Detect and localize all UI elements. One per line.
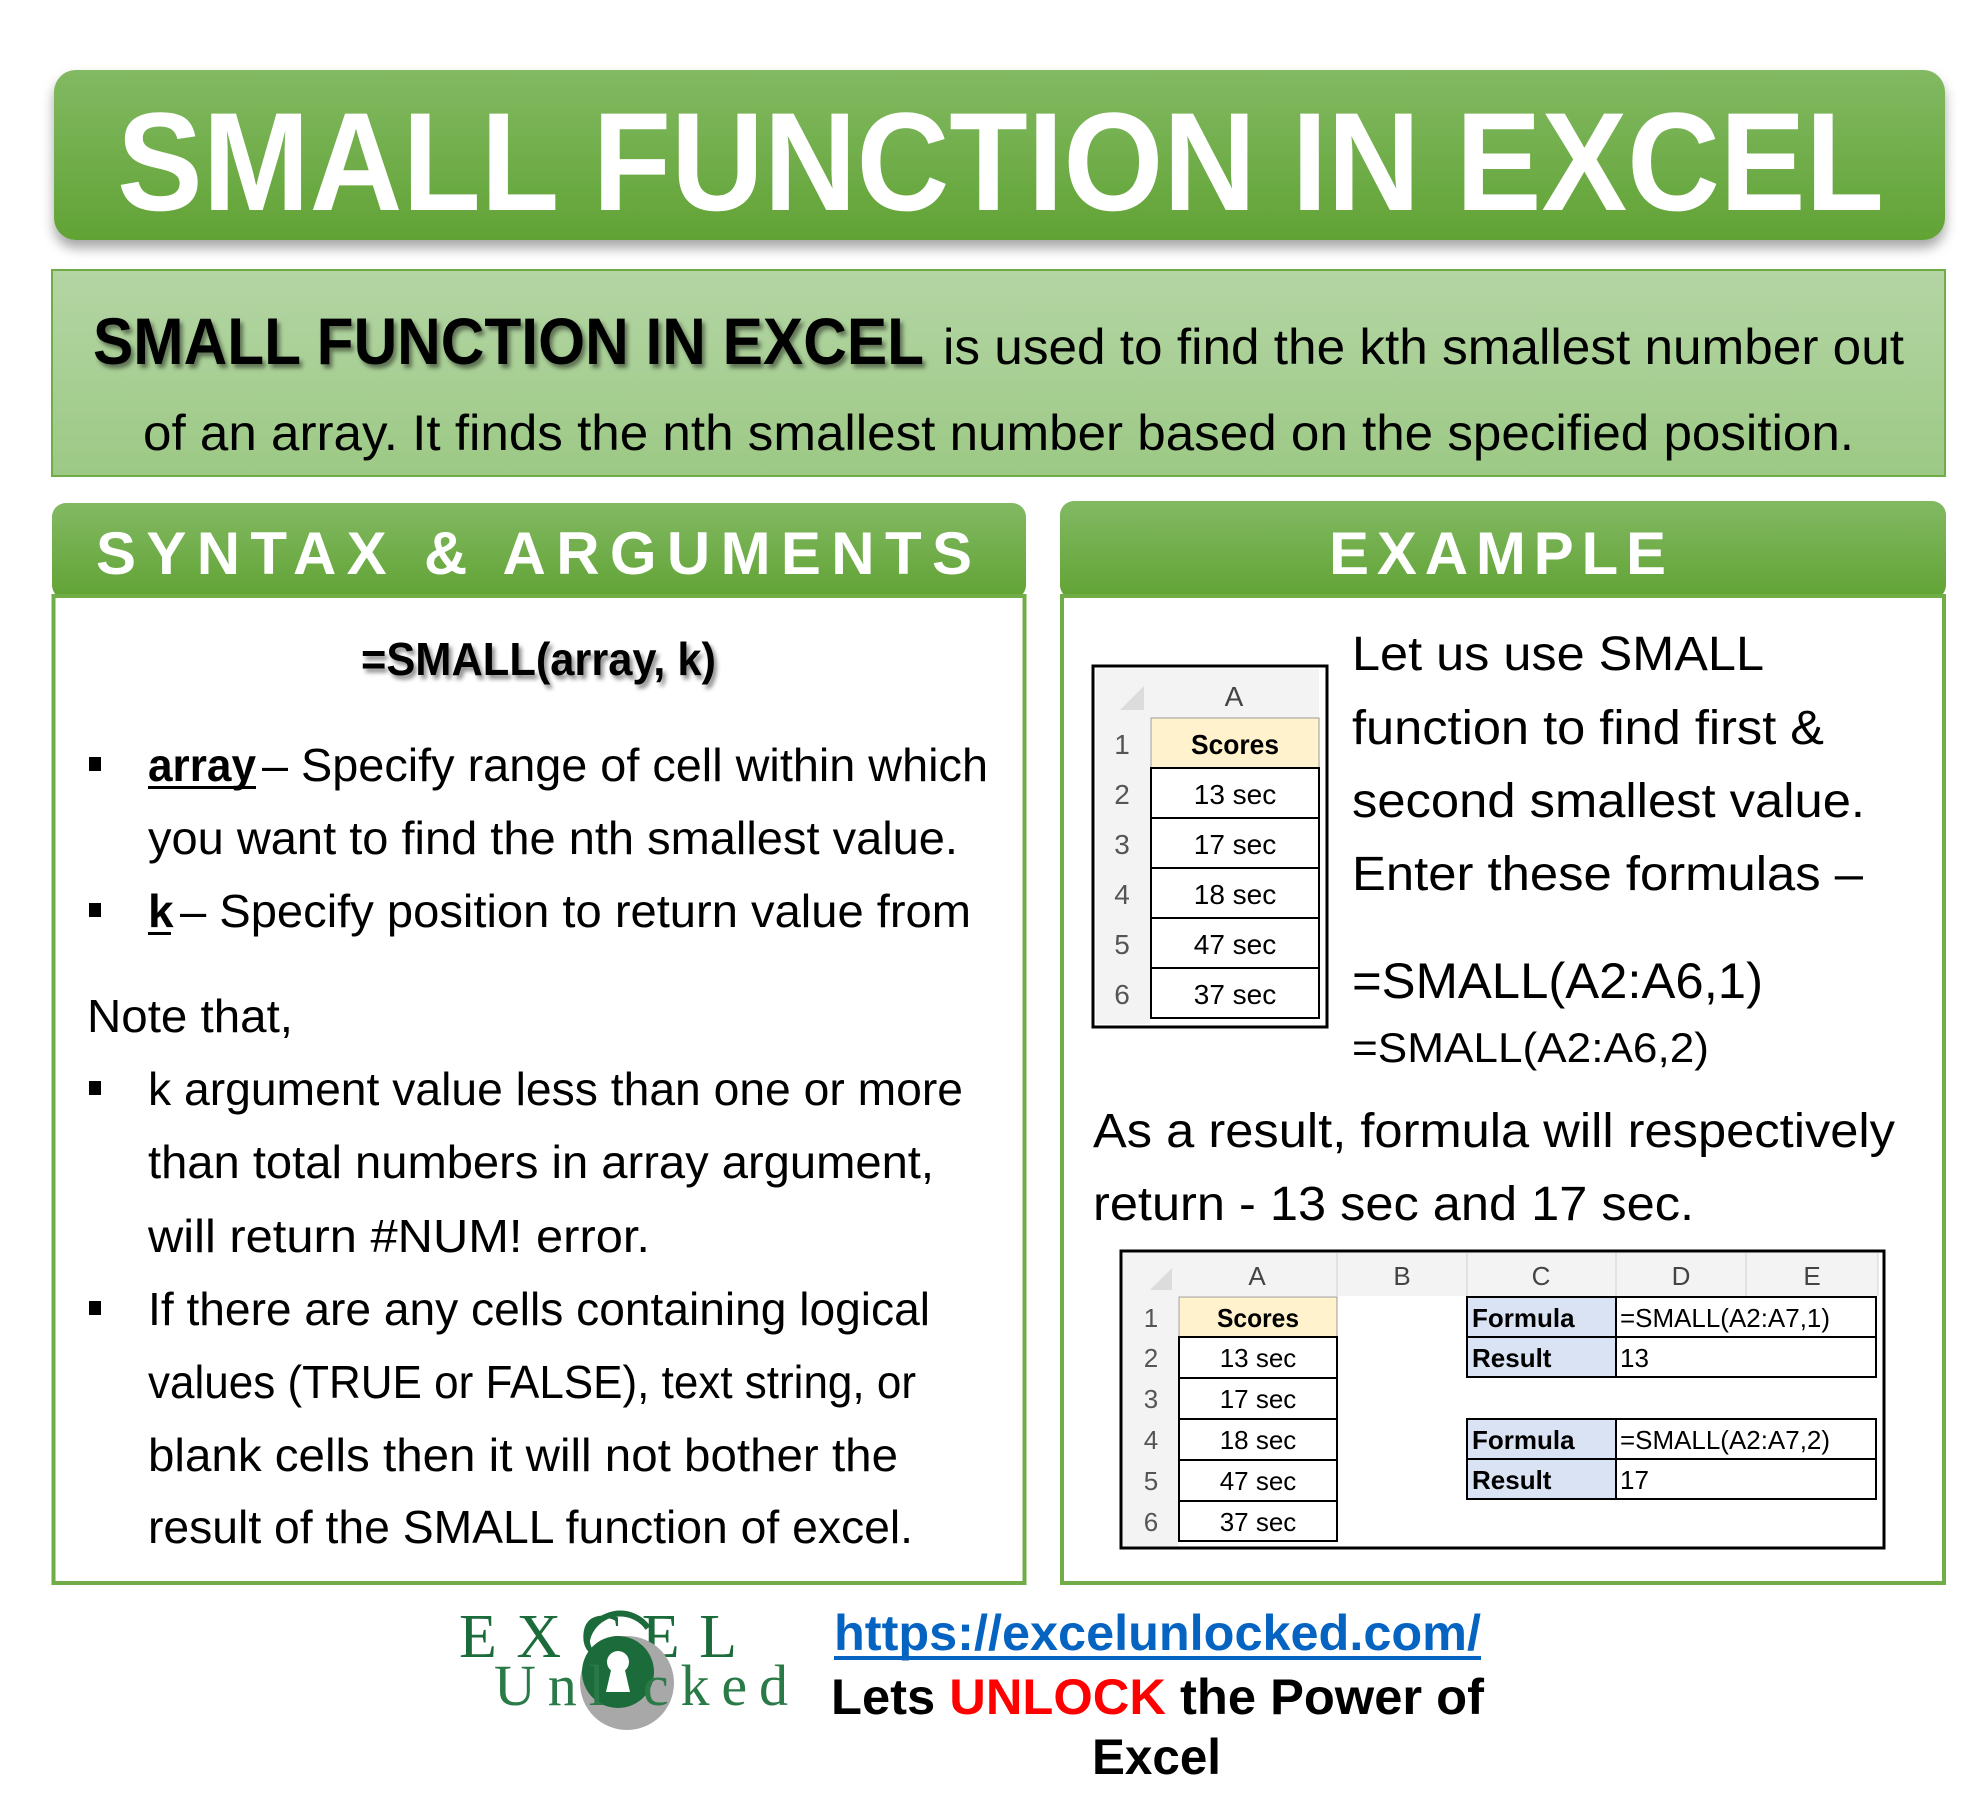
definition box: is used to find the kth smallest number out bbox=[943, 319, 1904, 375]
result table: Formula bbox=[1472, 1303, 1575, 1333]
result table: 4 bbox=[1144, 1425, 1158, 1455]
panel: example bbox=[1062, 596, 1944, 1583]
footer: url and tagline: https://excelunlocked.com/ bbox=[834, 1605, 1481, 1661]
header: example bbox=[1060, 501, 1946, 599]
small data table: 5 bbox=[1114, 929, 1130, 960]
result table: 5 bbox=[1144, 1466, 1158, 1496]
result table: Result bbox=[1472, 1465, 1552, 1495]
footer: url and tagline: Excel bbox=[1092, 1729, 1221, 1785]
result table: E bbox=[1803, 1261, 1821, 1291]
note text: than total numbers in array argument, bbox=[148, 1136, 934, 1188]
logo: excel unlocked: Unl cked bbox=[494, 1653, 788, 1718]
definition box: of an array. It finds the nth smallest number based on the specified position. bbox=[143, 405, 1854, 461]
definition box: SMALL FUNCTION IN EXCEL bbox=[93, 304, 924, 378]
header: syntax & arguments: SYNTAX & ARGUMENTS bbox=[96, 520, 972, 587]
result table: 1 bbox=[1144, 1303, 1158, 1333]
result table bbox=[1121, 1251, 1884, 1548]
panel: syntax bbox=[54, 596, 1024, 1583]
formulas: =SMALL(A2:A6,1) bbox=[1352, 953, 1763, 1009]
small data table: 13 sec bbox=[1194, 779, 1276, 810]
result table: Result bbox=[1472, 1343, 1552, 1373]
result table: 6 bbox=[1144, 1507, 1158, 1537]
result text: return - 13 sec and 17 sec. bbox=[1093, 1178, 1694, 1231]
bullet: array: array bbox=[148, 739, 256, 791]
note text: If there are any cells containing logical bbox=[148, 1283, 930, 1335]
result table: 13 sec bbox=[1220, 1343, 1296, 1373]
example description: function to find first & bbox=[1352, 702, 1824, 755]
example description: Let us use SMALL bbox=[1352, 628, 1764, 681]
result table: =SMALL(A2:A7,1) bbox=[1620, 1303, 1830, 1333]
small data table: 17 sec bbox=[1194, 829, 1276, 860]
logo: excel unlocked: EXCEL bbox=[459, 1603, 737, 1671]
result text: As a result, formula will respectively bbox=[1093, 1105, 1895, 1158]
example description: Enter these formulas – bbox=[1352, 848, 1863, 901]
note text: k argument value less than one or more bbox=[148, 1063, 963, 1115]
syntax formula: =SMALL(array, k) bbox=[361, 633, 716, 685]
note text: will return #NUM! error. bbox=[147, 1210, 650, 1262]
small data table: 18 sec bbox=[1194, 879, 1276, 910]
result table: 2 bbox=[1144, 1343, 1158, 1373]
result table: 3 bbox=[1144, 1384, 1158, 1414]
small data table: 2 bbox=[1114, 779, 1130, 810]
header: example: EXAMPLE bbox=[1329, 520, 1666, 587]
result table: B bbox=[1393, 1261, 1411, 1291]
definition box bbox=[52, 270, 1945, 476]
bullet: k: – Specify position to return value from bbox=[180, 885, 971, 937]
small data table: 3 bbox=[1114, 829, 1130, 860]
result text bbox=[1093, 1105, 1895, 1231]
bullet: k: k bbox=[148, 885, 174, 937]
bullet: array: – Specify range of cell within which bbox=[262, 739, 988, 791]
small data table: 6 bbox=[1114, 979, 1130, 1010]
footer: url and tagline: Lets UNLOCK the Power of bbox=[831, 1669, 1484, 1725]
note text bbox=[87, 990, 963, 1553]
small data table: 37 sec bbox=[1194, 979, 1276, 1010]
result table: 37 sec bbox=[1220, 1507, 1296, 1537]
result table: 13 bbox=[1620, 1343, 1649, 1373]
note text: Note that, bbox=[87, 990, 293, 1042]
footer: url and tagline bbox=[831, 1605, 1484, 1785]
example description: second smallest value. bbox=[1352, 775, 1865, 828]
small data table: Scores bbox=[1191, 729, 1279, 760]
result table: 47 sec bbox=[1220, 1466, 1296, 1496]
note text: blank cells then it will not bother the bbox=[148, 1429, 898, 1481]
logo: excel unlocked bbox=[459, 1603, 788, 1730]
result table: 17 bbox=[1620, 1465, 1649, 1495]
bullet: array: you want to find the nth smallest value. bbox=[148, 812, 958, 864]
small data table: 47 sec bbox=[1194, 929, 1276, 960]
result table: 17 sec bbox=[1220, 1384, 1296, 1414]
small data table bbox=[1093, 666, 1327, 1027]
small data table: A bbox=[1225, 681, 1244, 712]
small data table: 4 bbox=[1114, 879, 1130, 910]
header: syntax & arguments bbox=[52, 503, 1026, 599]
title banner: SMALL FUNCTION IN EXCEL bbox=[117, 83, 1884, 240]
result table: A bbox=[1248, 1261, 1266, 1291]
small data table: 1 bbox=[1114, 729, 1130, 760]
example description bbox=[1352, 628, 1865, 901]
note text: values (TRUE or FALSE), text string, or bbox=[148, 1356, 916, 1408]
result table: D bbox=[1672, 1261, 1690, 1291]
result table: C bbox=[1532, 1261, 1550, 1291]
formulas bbox=[1352, 953, 1763, 1071]
result table: Formula bbox=[1472, 1425, 1575, 1455]
result table: 18 sec bbox=[1220, 1425, 1296, 1455]
bullet: array bbox=[89, 739, 988, 864]
formulas: =SMALL(A2:A6,2) bbox=[1352, 1024, 1709, 1071]
result table: Scores bbox=[1217, 1303, 1299, 1333]
note text: result of the SMALL function of excel. bbox=[148, 1501, 913, 1553]
result table: =SMALL(A2:A7,2) bbox=[1620, 1425, 1830, 1455]
